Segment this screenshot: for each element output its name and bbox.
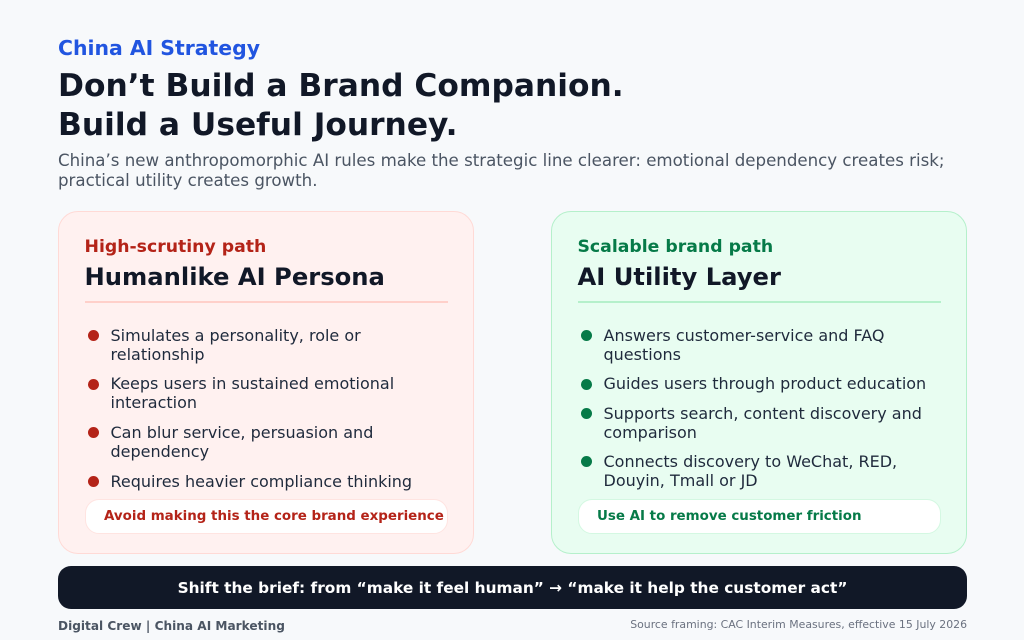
panel heading: AI Utility Layer: AI Utility Layer (578, 262, 781, 291)
bullet text: comparison (604, 422, 697, 442)
bullet text: Supports search, content discovery and (604, 404, 922, 422)
bullet text: Simulates a personality, role or (110, 326, 361, 344)
bullet text (604, 326, 885, 364)
callout text: use AI: Use AI to remove customer friction (597, 508, 862, 524)
banner: shift the brief: Shift the brief: from “make it feel human” → “make it help the customer act” (178, 579, 847, 597)
callout box: use AI (578, 499, 940, 534)
panel label: High-scrutiny path: High-scrutiny path (84, 237, 266, 257)
banner: shift the brief (58, 566, 967, 609)
bullet icon (581, 330, 592, 340)
bullet icon (88, 476, 99, 487)
callout text: avoid: Avoid making this the core brand experience (104, 508, 444, 524)
panel: high-scrutiny path (58, 211, 474, 554)
footer: brand: Digital Crew | China AI Marketing (58, 619, 285, 633)
subtitle: practical utility creates growth. (58, 171, 318, 190)
bullet text (110, 374, 394, 412)
subtitle: China’s new anthropomorphic AI rules make the strategic line clearer: emotional dependency creates risk; (58, 151, 944, 170)
footer: source: Source framing: CAC Interim Measures, effective 15 July 2026 (630, 618, 967, 631)
panel: scalable brand path (550, 211, 966, 554)
subtitle (58, 151, 944, 190)
bullet text (604, 452, 897, 490)
bullet text: Douyin, Tmall or JD (604, 471, 758, 490)
bullet icon (88, 427, 99, 438)
bullet text (604, 404, 922, 442)
bullet text: Can blur service, persuasion and (110, 422, 373, 442)
title: Don’t Build a Brand Companion. (58, 68, 624, 104)
bullet text (110, 422, 373, 460)
eyebrow: China AI Strategy: China AI Strategy (58, 36, 260, 60)
bullet text: Guides users through product education (604, 374, 926, 393)
bullet icon (581, 456, 592, 467)
title: Build a Useful Journey. (58, 106, 457, 142)
bullet icon (88, 330, 99, 340)
bullet icon (581, 378, 592, 390)
bullet text: Connects discovery to WeChat, RED, (604, 452, 897, 471)
title (58, 68, 624, 142)
bullet text: questions (604, 344, 681, 364)
panel label: Scalable brand path: Scalable brand path (578, 237, 773, 257)
bullet text: relationship (110, 344, 205, 364)
bullet text: Keeps users in sustained emotional (110, 374, 394, 393)
bullet text: dependency (110, 442, 209, 460)
bullet text: Requires heavier compliance thinking (110, 472, 412, 490)
bullet icon (581, 408, 592, 419)
bullet text (110, 326, 361, 364)
bullet text: interaction (110, 393, 197, 412)
callout box: avoid (84, 499, 448, 534)
panel heading: Humanlike AI Persona: Humanlike AI Persona (84, 262, 385, 291)
bullet text: Answers customer-service and FAQ (604, 326, 885, 344)
bullet icon (88, 378, 99, 390)
